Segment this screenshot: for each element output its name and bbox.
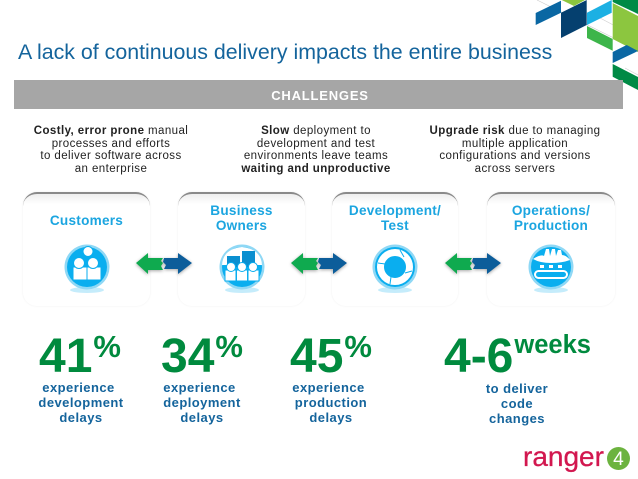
text: upgrade risk: configurations and versions — [439, 150, 591, 162]
text: slow: environments leave teams — [244, 150, 388, 162]
heading: development test: Test — [381, 218, 409, 233]
label: production delays — [292, 380, 367, 425]
arrows: development to operations — [444, 253, 502, 276]
label: deliver code changes: to deliver — [486, 381, 548, 396]
stat: 41%: 41% — [39, 329, 121, 383]
logo: ranger4: 4 — [613, 449, 624, 470]
arrows: business owners to development — [290, 253, 348, 276]
text: costly: processes and efforts — [52, 138, 170, 150]
stat: 4-6 weeks: 4-6weeks — [444, 330, 591, 383]
label: production delays: production — [295, 395, 367, 410]
text: costly: Costly, error prone manual — [34, 125, 188, 137]
icon: operations factory — [528, 244, 574, 293]
heading: operations production — [512, 203, 590, 233]
text: costly — [34, 125, 188, 175]
label: development delays: delays — [59, 410, 103, 425]
text: slow: waiting and unproductive — [241, 163, 391, 175]
label: deployment delays: deployment — [163, 395, 241, 410]
heading: customers: Customers — [50, 213, 123, 228]
corner decoration — [536, 0, 638, 90]
icon: customers — [64, 244, 110, 293]
heading: business owners — [210, 203, 273, 233]
stat: 45%: 45% — [290, 329, 372, 383]
label: development delays: experience — [42, 380, 115, 395]
label: deployment delays — [163, 380, 241, 425]
heading: development test: Development/ — [349, 203, 441, 218]
text: upgrade risk: multiple application — [462, 138, 568, 150]
heading: development test — [349, 203, 441, 233]
label: development delays — [38, 380, 124, 425]
heading: business owners: Owners — [216, 218, 267, 233]
text: upgrade risk: across servers — [475, 163, 555, 175]
heading: operations production: Operations/ — [512, 203, 590, 218]
text: slow — [241, 125, 391, 175]
heading: business owners: Business — [210, 203, 273, 218]
label: production delays: experience — [292, 380, 365, 395]
icon: development cycle — [372, 244, 418, 293]
heading: operations production: Production — [514, 218, 588, 233]
text: costly: to deliver software across — [40, 150, 182, 162]
text: upgrade risk — [430, 125, 600, 175]
card: operations production — [487, 192, 615, 306]
icon: business owners — [220, 244, 264, 293]
text: slow: development and test — [257, 138, 375, 150]
text: slow: Slow deployment to — [261, 125, 371, 137]
text: costly: an enterprise — [75, 163, 147, 175]
label: production delays: delays — [309, 410, 353, 425]
label: deliver code changes: changes — [489, 411, 545, 426]
card: customers — [23, 192, 150, 306]
label: deliver code changes — [486, 381, 548, 426]
logo: ranger4: ranger — [523, 441, 604, 472]
arrows: customers to business owners — [135, 253, 193, 276]
label: development delays: development — [38, 395, 124, 410]
title: A lack of continuous delivery impacts the entire business — [18, 40, 552, 64]
challenges banner — [14, 80, 623, 109]
label: deployment delays: delays — [180, 410, 224, 425]
label: deliver code changes: code — [501, 396, 533, 411]
card: business owners — [178, 192, 305, 306]
label: deployment delays: experience — [163, 380, 236, 395]
challenges banner: CHALLENGES — [271, 88, 369, 103]
text: upgrade risk: Upgrade risk due to managing — [430, 125, 600, 137]
card: development test — [332, 192, 458, 306]
stat: 34%: 34% — [161, 329, 243, 383]
